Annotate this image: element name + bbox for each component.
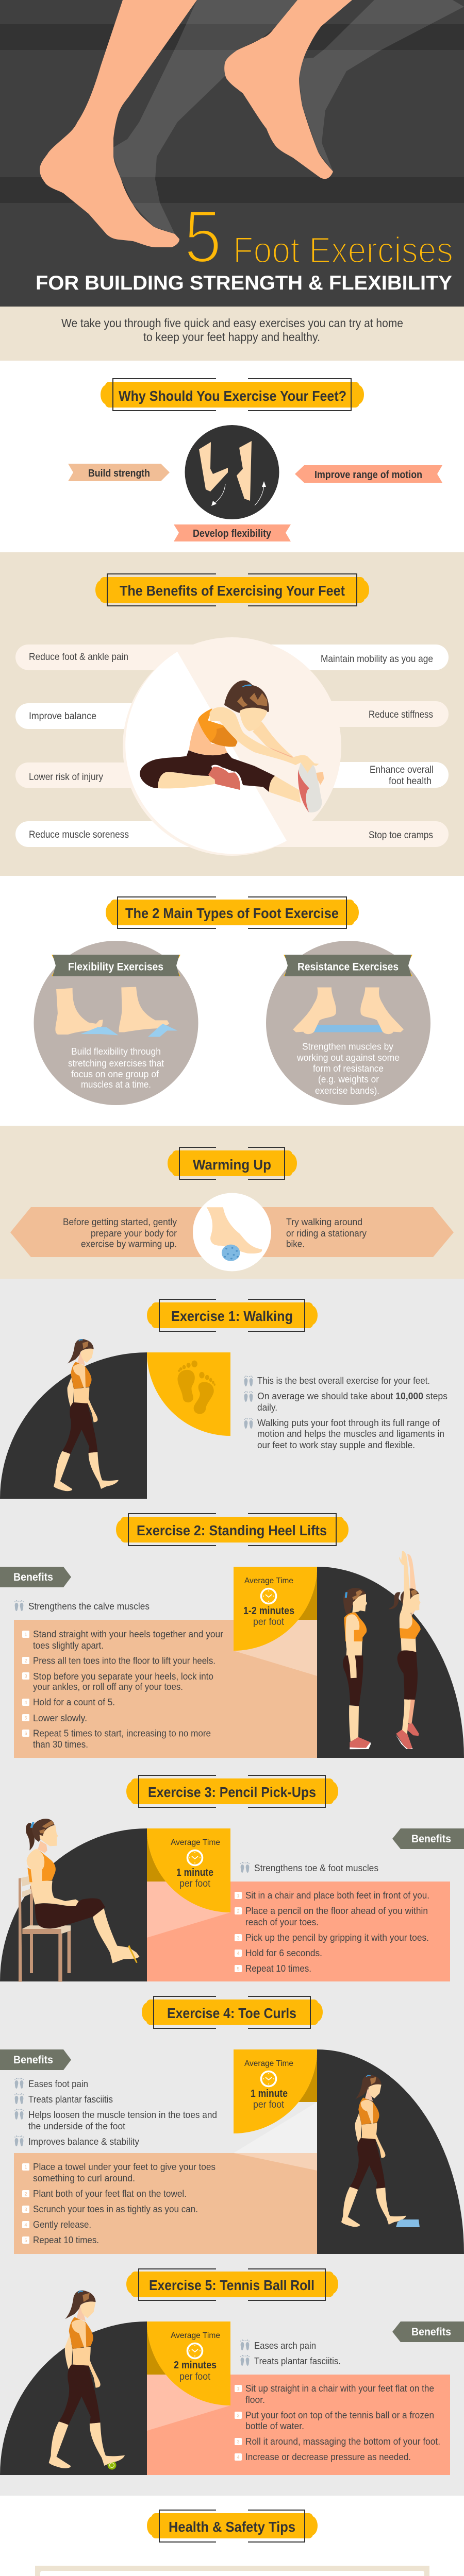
benefits tab: Benefits	[13, 2054, 53, 2066]
steps panel	[14, 2102, 317, 2254]
heading: the benefits: The Benefits of Exercising Your Feet	[120, 583, 345, 599]
heading: exercise 3	[126, 1775, 338, 1807]
panel: exercise 4 toe curls	[0, 1996, 464, 2254]
card: flexibility exercises: focus on one group of	[71, 1069, 159, 1079]
card: flexibility exercises: Build flexibility through	[71, 1046, 161, 1057]
steps panel: Repeat 10 times.	[33, 2235, 99, 2245]
heading: why should you exercise	[101, 379, 364, 411]
average time card	[234, 1567, 317, 1651]
steps panel: Place a pencil on the floor ahead of you within	[245, 1906, 428, 1916]
walking facts: Walking puts your foot through its full range of	[257, 1418, 440, 1428]
illustration: left leg	[40, 0, 197, 247]
benefits tab	[392, 1828, 464, 1849]
benefit pills	[15, 645, 449, 847]
card: flexibility exercises	[34, 941, 198, 1105]
ribbon: improve range of motion: Improve range of motion	[314, 469, 422, 481]
illustration: stretching woman	[140, 681, 324, 812]
steps panel: than 30 times.	[33, 1739, 88, 1750]
benefit labels: Reduce muscle soreness	[29, 829, 129, 840]
average time card: Average Time	[244, 1577, 293, 1585]
walking facts: daily.	[257, 1402, 277, 1413]
steps panel: 3	[24, 1673, 27, 1679]
title: 5 Foot Exercises	[184, 195, 453, 278]
ribbon: build strength	[68, 464, 170, 481]
card: resistance exercises: exercise bands).	[315, 1086, 379, 1096]
average time card: 2 minutes	[174, 2360, 217, 2371]
steps panel: 6	[24, 1731, 27, 1736]
steps panel: 1	[237, 1893, 240, 1898]
heading: exercise 2	[116, 1514, 349, 1546]
steps panel: Increase or decrease pressure as needed.	[245, 2452, 411, 2462]
steps panel: Put your foot on top of the tennis ball or a frozen	[245, 2410, 434, 2420]
intro text panel: to keep your feet happy and healthy.	[143, 330, 320, 344]
steps panel: 1	[24, 1632, 27, 1637]
average time card	[234, 2049, 317, 2133]
benefit items	[14, 2078, 217, 2147]
heading: the 2 main types	[106, 897, 359, 928]
steps panel: Plant both of your feet flat on the towel.	[33, 2189, 187, 2199]
average time card: 1-2 minutes	[243, 1605, 294, 1617]
intro text panel	[0, 307, 464, 361]
heading: exercise 5	[126, 2269, 338, 2300]
benefit items: the underside of the foot	[28, 2121, 125, 2131]
steps panel: 4	[24, 2223, 27, 2228]
text: warm up left: exercise by warming up.	[81, 1239, 177, 1249]
steps panel: toes slightly apart.	[33, 1640, 104, 1651]
steps panel: 4	[237, 2454, 240, 2460]
steps panel: Roll it around, massaging the bottom of your foot.	[245, 2436, 440, 2447]
average time card: 1 minute	[176, 1867, 213, 1878]
card: flexibility exercises: Flexibility Exercises	[68, 961, 163, 973]
steps panel: Lower slowly.	[33, 1713, 87, 1723]
illustration: right leg	[224, 0, 352, 179]
steps panel	[147, 1882, 450, 1981]
panel: exercises background	[0, 1279, 464, 2496]
icon: flexing feet circle	[185, 425, 279, 519]
panel: exercise 5 tennis ball roll	[0, 2269, 464, 2475]
heading: exercise 5: Exercise 5: Tennis Ball Roll	[149, 2277, 314, 2293]
steps panel: Repeat 5 times to start, increasing to no more	[33, 1728, 211, 1738]
benefits tab: Benefits	[411, 1833, 451, 1845]
heading: health and safety	[147, 2510, 318, 2542]
title: 5 Foot Exercises: 5	[184, 195, 222, 278]
steps panel: 5	[237, 1966, 240, 1971]
subtitle: FOR BUILDING STRENGTH & FLEXIBILITY	[36, 272, 452, 294]
yellow quarter with footprints	[147, 1352, 230, 1436]
dark quarter panel	[0, 2321, 147, 2475]
text: warm up right: or riding a stationary	[286, 1228, 367, 1239]
steps panel: 3	[237, 1935, 240, 1940]
steps panel: Pick up the pencil by gripping it with your toes.	[245, 1933, 429, 1943]
heading: exercise 4	[142, 1996, 323, 2028]
steps panel: Stand straight with your heels together and your	[33, 1629, 223, 1639]
steps panel: 2	[237, 2413, 240, 2418]
benefit items: Eases arch pain	[254, 2341, 316, 2351]
heading: exercise 3: Exercise 3: Pencil Pick-Ups	[148, 1784, 316, 1800]
ribbon: develop flexibility: Develop flexibility	[193, 528, 272, 539]
benefit item: Strengthens the calve muscles	[28, 1601, 150, 1612]
card: resistance exercises: form of resistance	[313, 1063, 384, 1074]
steps panel: Sit up straight in a chair with your feet flat on the	[245, 2383, 434, 2394]
benefit items	[240, 2340, 341, 2366]
heading: exercise 4: Exercise 4: Toe Curls	[167, 2005, 296, 2021]
dark quarter panel	[317, 2049, 464, 2254]
walking facts: This is the best overall exercise for your feet.	[257, 1376, 430, 1386]
walking facts: motion and helps the muscles and ligaments in	[257, 1429, 444, 1439]
icon: feet with band	[293, 987, 404, 1034]
benefits tab	[0, 2049, 71, 2070]
walking facts	[244, 1376, 448, 1450]
benefits tab	[0, 1567, 71, 1587]
benefit labels: Reduce foot & ankle pain	[29, 652, 128, 663]
card: flexibility exercises: stretching exercises that	[68, 1058, 164, 1069]
benefit labels	[29, 652, 434, 841]
intro text panel: We take you through five quick and easy exercises you can try at home	[61, 316, 403, 330]
walking facts: our feet to work stay supple and flexible.	[257, 1440, 415, 1450]
steps panel: 5	[24, 1716, 27, 1721]
illustration: woman rolling tennis ball	[49, 2291, 125, 2470]
illustration: heel lift women	[343, 1551, 421, 1749]
steps panel: Scrunch your toes in as tightly as you can.	[33, 2204, 198, 2214]
steps panel: 3	[24, 2207, 27, 2212]
average time card: per foot	[179, 1878, 211, 1889]
benefit labels: Lower risk of injury	[29, 772, 103, 783]
panel: exercise 2 heel lifts	[0, 1514, 464, 1758]
panel: exercise 3 pencil pick-ups	[0, 1775, 464, 1982]
steps panel: 4	[237, 1951, 240, 1956]
average time card: per foot	[253, 2099, 285, 2110]
text: warm up left: prepare your body for	[91, 1228, 177, 1239]
heading: warming up: Warming Up	[193, 1157, 271, 1173]
benefit items: Treats plantar fasciitis	[28, 2094, 113, 2105]
steps panel: Stop before you separate your heels, lock into	[33, 1671, 213, 1682]
steps panel: your ankles, or roll off any of your toes.	[33, 1682, 183, 1692]
heading: the 2 main types: The 2 Main Types of Foot Exercise	[125, 905, 339, 921]
benefit items: Eases foot pain	[28, 2079, 88, 2089]
steps panel: Press all ten toes into the floor to lift your heels.	[33, 1656, 216, 1666]
panel: why exercise your feet	[68, 379, 442, 541]
card: resistance exercises	[266, 941, 430, 1105]
steps panel: Hold for a count of 5.	[33, 1697, 115, 1707]
average time card	[147, 2321, 230, 2405]
benefit item: Strengthens toe & foot muscles	[254, 1863, 378, 1873]
ribbon: build strength: Build strength	[88, 468, 150, 479]
heading: why should you exercise: Why Should You Exercise Your Feet?	[119, 388, 346, 404]
consult a doctor notice	[35, 2566, 429, 2576]
icon: feet with towel	[55, 987, 177, 1037]
dark quarter panel	[317, 1567, 464, 1758]
panel: warming up	[0, 1126, 464, 1279]
benefit items: Helps loosen the muscle tension in the toes and	[28, 2110, 217, 2120]
average time card: Average Time	[171, 2331, 220, 2340]
text: warm up right: bike.	[286, 1239, 305, 1249]
dark quarter panel	[0, 1352, 147, 1499]
benefit items: Treats plantar fasciitis.	[254, 2356, 341, 2366]
benefit labels: Stop toe cramps	[369, 830, 433, 841]
text: warm up right: Try walking around	[286, 1217, 362, 1227]
central split circle	[123, 637, 341, 856]
average time card	[147, 1828, 230, 1912]
panel: two types of exercise	[34, 897, 430, 1105]
steps panel: 2	[24, 2192, 27, 2197]
benefits tab: Benefits	[13, 1571, 53, 1583]
illustration: woman curling toes on towel	[341, 2075, 420, 2227]
heading: exercise 1	[147, 1299, 318, 1331]
steps panel: floor.	[245, 2395, 265, 2405]
steps panel: 4	[24, 1700, 27, 1705]
steps panel: bottle of water.	[245, 2421, 304, 2431]
panel: benefits of exercising	[0, 552, 464, 876]
text: warm up right	[286, 1217, 367, 1249]
average time card: per foot	[179, 2371, 211, 2382]
text: warm up left: Before getting started, gently	[63, 1217, 177, 1227]
card: resistance exercises: Resistance Exercises	[297, 961, 399, 973]
steps panel	[14, 1620, 317, 1758]
heading: exercise 1: Exercise 1: Walking	[171, 1308, 293, 1324]
steps panel: something to curl around.	[33, 2173, 135, 2183]
heading: the benefits	[95, 574, 369, 606]
steps panel: reach of your toes.	[245, 1917, 319, 1927]
steps panel: Gently release.	[33, 2219, 91, 2230]
steps panel: 1	[24, 2165, 27, 2170]
ribbon: develop flexibility	[174, 524, 291, 541]
heading: exercise 2: Exercise 2: Standing Heel Lifts	[137, 1522, 327, 1538]
steps panel: 1	[237, 2386, 240, 2392]
steps panel: 3	[237, 2439, 240, 2444]
illustration: seated woman on chair	[19, 1819, 140, 1982]
benefit labels: foot health	[389, 776, 432, 787]
benefits tab	[392, 2321, 464, 2342]
banner shape	[10, 1207, 454, 1257]
text: warm up left	[63, 1217, 177, 1249]
steps panel: 5	[24, 2238, 27, 2243]
card: resistance exercises: Strengthen muscles by	[302, 1042, 393, 1052]
card: flexibility exercises: muscles at a time.	[81, 1079, 151, 1090]
average time card: Average Time	[244, 2059, 293, 2068]
walking facts: On average we should take about 10,000 steps	[257, 1391, 448, 1401]
average time card: Average Time	[171, 1838, 220, 1847]
heading: health and safety: Health & Safety Tips	[169, 2519, 295, 2535]
ribbon: improve range of motion	[295, 465, 442, 483]
dark quarter panel	[0, 1828, 147, 1981]
benefits tab: Benefits	[411, 2326, 451, 2338]
steps panel: 2	[24, 1658, 27, 1663]
illustration: walking woman	[54, 1339, 119, 1491]
benefit labels: Maintain mobility as you age	[321, 654, 433, 665]
steps panel: Hold for 6 seconds.	[245, 1948, 322, 1958]
panel: health and safety tips	[9, 2510, 450, 2576]
hero panel	[0, 0, 464, 307]
icon: foot on ball	[193, 1193, 271, 1272]
steps panel	[147, 2375, 450, 2475]
average time card: 1 minute	[251, 2088, 288, 2099]
panel: exercise 1 walking	[0, 1299, 448, 1499]
card: resistance exercises: (e.g. weights or	[318, 1074, 379, 1084]
heading: warming up	[168, 1147, 297, 1179]
average time card: per foot	[253, 1617, 285, 1628]
steps panel: Repeat 10 times.	[245, 1963, 311, 1974]
steps panel: Sit in a chair and place both feet in front of you.	[245, 1890, 429, 1901]
steps panel: Place a towel under your feet to give your toes	[33, 2162, 216, 2172]
benefit labels: Enhance overall	[370, 765, 434, 775]
card: resistance exercises: working out against some	[296, 1053, 400, 1063]
benefit items: Improves balance & stability	[28, 2137, 139, 2147]
benefit labels: Reduce stiffness	[369, 709, 433, 720]
benefit labels: Improve balance	[29, 711, 96, 722]
steps panel: 2	[237, 1908, 240, 1913]
